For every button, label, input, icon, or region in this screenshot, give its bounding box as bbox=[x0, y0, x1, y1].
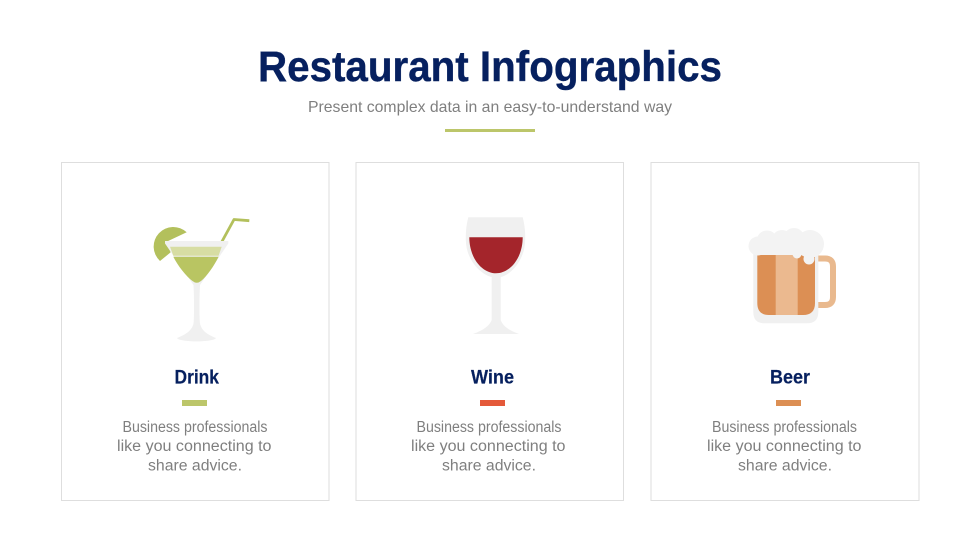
text: beer description: like you connecting to bbox=[707, 438, 862, 455]
text: drink description: like you connecting to bbox=[117, 438, 272, 455]
heading: drink: Drink bbox=[174, 368, 219, 388]
accent bar: beer bbox=[776, 400, 801, 406]
panel: wine bbox=[356, 162, 624, 500]
text: wine description: like you connecting to bbox=[411, 438, 566, 455]
subtitle: Present complex data in an easy-to-understand way bbox=[308, 99, 672, 116]
icon: cocktail glass bbox=[154, 220, 249, 341]
text: drink description: share advice. bbox=[148, 458, 242, 474]
text: beer description bbox=[707, 419, 862, 474]
text: wine description bbox=[411, 419, 566, 474]
title underline bbox=[445, 129, 535, 132]
icon: beer mug bbox=[748, 228, 833, 323]
text: beer description: share advice. bbox=[738, 458, 832, 474]
accent bar: drink bbox=[182, 400, 207, 406]
title: Restaurant Infographics bbox=[258, 43, 722, 91]
text: wine description: share advice. bbox=[442, 458, 536, 474]
accent bar: wine bbox=[480, 400, 505, 406]
text: drink description bbox=[117, 419, 272, 474]
text: drink description: Business professionals bbox=[122, 419, 268, 436]
panel: drink bbox=[62, 162, 329, 500]
text: beer description: Business professionals bbox=[712, 419, 857, 436]
heading: wine: Wine bbox=[471, 368, 514, 388]
text: wine description: Business professionals bbox=[416, 419, 562, 436]
icon: wine glass bbox=[466, 217, 525, 334]
heading: beer: Beer bbox=[770, 368, 811, 388]
panel: beer bbox=[651, 162, 919, 500]
